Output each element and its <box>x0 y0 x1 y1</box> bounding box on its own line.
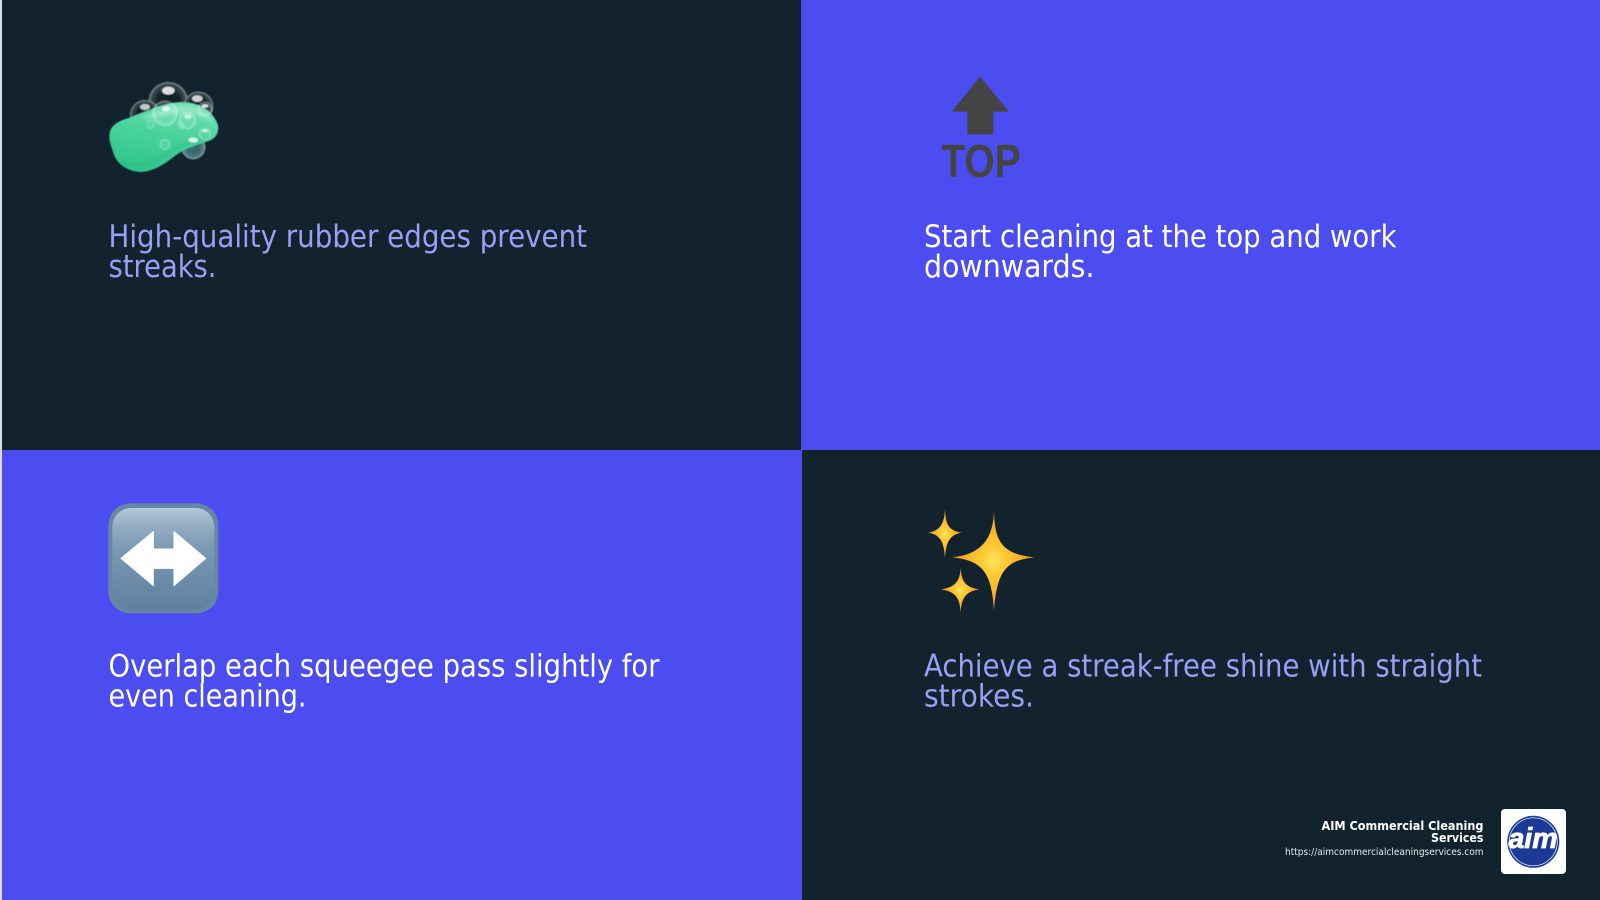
text: streak-free shine: Achieve a streak-free shine with straight <box>924 648 1482 684</box>
text: streak-free shine <box>924 648 1482 714</box>
panel: rubber edges <box>2 0 801 450</box>
panel: overlap passes <box>2 450 802 900</box>
text: rubber edges: streaks. <box>108 249 216 285</box>
logo: aim badge: aim <box>1508 823 1558 855</box>
icon: left-right arrow key <box>108 503 218 613</box>
left edge strip <box>0 0 2 900</box>
text: overlap passes <box>108 648 660 714</box>
panel: start at the top <box>801 0 1600 450</box>
text: rubber edges: High-quality rubber edges prevent <box>108 219 587 255</box>
text: streak-free shine: strokes. <box>924 678 1034 714</box>
website url: https://aimcommercialcleaningservices.com <box>1285 847 1484 858</box>
text: overlap passes: even cleaning. <box>108 678 306 714</box>
text: start at the top: downwards. <box>924 249 1094 285</box>
brand name <box>1322 818 1484 845</box>
text: overlap passes: Overlap each squeegee pass slightly for <box>108 648 660 684</box>
icon: top arrow <box>941 77 1021 187</box>
icon: top arrow: TOP <box>941 135 1021 187</box>
icon: soap with bubbles <box>109 82 218 172</box>
logo: aim badge <box>1501 809 1566 874</box>
brand name: Services <box>1431 830 1484 845</box>
brand name: AIM Commercial Cleaning <box>1322 818 1484 833</box>
icon: sparkles <box>928 509 1034 612</box>
footer: brand block <box>1285 809 1566 874</box>
text: rubber edges <box>108 219 587 285</box>
text: start at the top <box>924 219 1397 285</box>
text: start at the top: Start cleaning at the top and work <box>924 219 1397 255</box>
panel: streak-free shine <box>802 450 1600 900</box>
